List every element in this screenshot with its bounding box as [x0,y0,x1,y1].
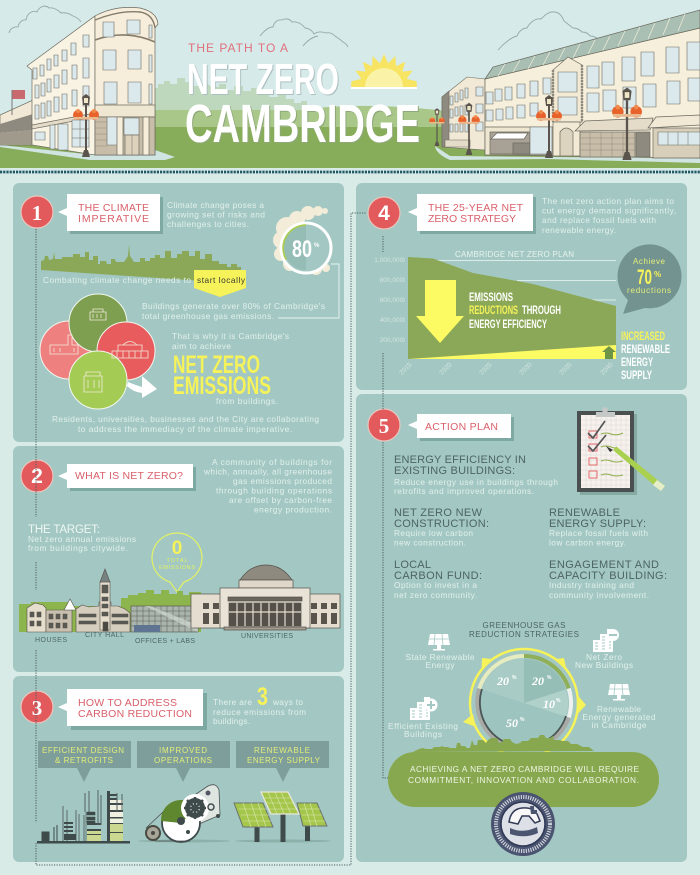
building labels: UNIVERSITIES [241,633,293,640]
start locally callout: start locally [197,275,246,285]
strategies title: REDUCTION STRATEGIES [469,630,579,639]
sun pie chart [463,649,586,757]
panel 3: how to address carbon reduction [13,676,344,862]
ring 80 percent [281,223,331,273]
label: state renewable [406,652,475,670]
action: energy efficiency [394,454,558,496]
badge 3 [21,691,53,723]
action: energy efficiency: retrofits and improved operations. [394,486,534,496]
houses [27,599,76,632]
emissions reductions text: ENERGY EFFICIENCY [469,317,547,331]
city seal [491,792,555,856]
strategy text: cut energy demand significantly, [542,206,676,216]
three ways text: ways to [272,697,303,707]
building labels: CITY HALL [85,632,124,639]
sun [351,54,417,89]
subtitle: THE PATH TO A [188,41,288,55]
hedge [19,590,201,632]
area chart: CAMBRIDGE NET ZERO PLAN [455,250,574,259]
lamp posts [73,88,642,160]
aim text: aim to achieve [172,341,231,351]
icon: local renewable [608,684,630,700]
net zero emissions: EMISSIONS [173,372,271,400]
badge 2 [21,460,53,492]
increased renewable supply text: INCREASED [621,329,665,343]
intro text: challenges to cities. [167,219,249,229]
heading 4 [408,194,536,234]
badge 2: 2 [31,465,43,488]
main grass [0,127,700,168]
definition text: which, annually, all greenhouse [203,466,332,476]
panel 5: action plan [356,394,687,862]
label: state renewable: State Renewable [406,652,475,662]
label: net zero buildings: New Buildings [575,660,633,670]
label: renewable energy supply [236,741,329,782]
sun pie chart: % [512,675,517,681]
title: net zero: NET ZERO [187,55,339,104]
action: local carbon fund: Option to invest in a [394,580,477,590]
strategy text: The net zero action plan aims to [542,196,674,206]
badge 3: 3 [32,696,42,720]
label: efficient design [38,741,131,782]
intro text [167,200,265,229]
label: local renewable: in Cambridge [592,720,647,730]
increased renewable supply text: SUPPLY [621,368,652,382]
three ways text: There are [213,697,252,707]
action: renewable energy supply: ENERGY SUPPLY: [549,518,646,530]
action: engagement [549,559,667,600]
buildings text: Buildings generate over 80% of Cambridge's [142,301,325,311]
closing pill with skyline: COMMITMENT, INNOVATION AND COLLABORATION. [408,775,639,785]
cloud around ring [273,206,330,275]
strategy text: and replace fossil fuels with [542,215,656,225]
sun pie chart: 10 [543,697,555,711]
area chart: 2015 [398,361,414,377]
definition text: energy production. [254,504,332,514]
zero total emissions bubble: TOTAL [166,558,188,564]
down arrow [416,280,464,343]
badge 4: 4 [378,202,390,225]
heading 5: ACTION PLAN [425,421,498,433]
action: engagement: Industry training and [549,580,634,590]
city hall [76,569,130,632]
action: engagement: community involvement. [549,590,649,600]
label: renewable energy supply: RENEWABLE [254,746,310,755]
emissions reductions text [469,290,561,331]
area chart: 2020 [438,361,454,377]
action: local carbon fund: CARBON FUND: [394,570,482,582]
label: local renewable: Energy generated [582,712,656,722]
closing text [52,414,319,434]
net zero emissions: NET ZERO [173,351,260,379]
closing text: to address the immediacy of the climate imperative. [78,424,292,434]
area chart: 2030 [518,361,534,377]
action: energy efficiency: Reduce energy use in buildings through [394,477,558,487]
from buildings: from buildings. [216,396,278,406]
dotted rule [0,171,700,173]
start locally callout [43,270,246,297]
sun pie chart: 50 [506,716,518,730]
badge 1 [21,196,53,228]
the target: from buildings citywide. [28,543,128,553]
start locally callout: Combating climate change needs to [43,275,191,285]
label: improved operations: OPERATIONS [154,756,212,765]
heading 3: HOW TO ADDRESS [78,697,177,709]
panel 4: 25-year strategy [356,183,687,390]
area chart: 1,000,000t [374,257,405,264]
building labels: OFFICES + LABS [135,638,195,645]
three ways text: 3 [257,683,268,711]
three ways text [213,683,306,726]
icon: state renewable [428,634,450,650]
label: local renewable: Renewable [597,704,641,714]
area chart: 200,000t [380,337,405,344]
hills [150,106,470,150]
label: net zero buildings: Net Zero [586,652,622,662]
zero total emissions bubble: 0 [172,538,182,559]
label: efficient design: EFFICIENT DESIGN [42,746,124,755]
heading 1: THE CLIMATE [78,202,149,214]
action: engagement: CAPACITY BUILDING: [549,570,667,582]
heading 2: WHAT IS NET ZERO? [75,470,183,482]
badge 5: 5 [379,414,389,438]
right sidewalk [435,146,700,163]
title: cambridge: CAMBRIDGE [186,95,421,155]
clouds [9,6,601,50]
definition text: through building operations [216,486,332,496]
three ways text: reduce emissions from [213,707,306,717]
action: renewable energy supply: low carbon energy. [549,538,626,548]
the target: Net zero annual emissions [28,534,136,544]
strategies title: GREENHOUSE GAS [482,621,566,630]
intro text: growing set of risks and [167,210,265,220]
action: net zero new construction: NET ZERO NEW [394,507,483,519]
achieve 70 percent bubble: reductions [627,286,671,295]
heading 2 [58,464,196,491]
header illustration [0,0,700,172]
area chart: 2040 [599,361,615,377]
definition text [203,457,332,514]
increased renewable supply text: ENERGY [621,355,653,369]
definition text: gas emissions produced [233,476,332,486]
area chart: 400,000t [380,317,405,324]
achieve 70 percent bubble [618,244,682,314]
label: renewable energy supply: ENERGY SUPPLY [247,756,321,765]
area chart: 2035 [558,361,574,377]
increased renewable supply text [621,329,670,382]
action: net zero new construction [394,507,489,548]
badge 4 [368,197,400,229]
buildings text [142,301,325,321]
strategy text [542,196,676,235]
the target [28,524,136,553]
offices and labs [131,606,198,632]
title: cambridge: CAMBRIDGE [185,94,420,154]
label: state renewable: Energy [426,660,455,670]
badge 1: 1 [32,201,42,225]
icon: solar panels [234,792,331,842]
area chart: 800,000t [380,277,405,284]
area chart: 600,000t [380,297,405,304]
area chart: 2025 [478,361,494,377]
strategies title [469,621,579,639]
emissions reductions text: REDUCTIONS [469,303,518,317]
label: efficient buildings [388,721,458,739]
ring 80 percent: 80 [292,236,312,263]
right small building [442,77,485,150]
title: net zero [187,55,340,105]
aim text: That is why it is Cambridge's [172,331,289,341]
label: efficient buildings: Buildings [404,729,442,739]
action: renewable energy supply: RENEWABLE [549,507,620,519]
achieve 70 percent bubble: Achieve [633,257,666,266]
heading 1: IMPERATIVE [78,213,149,225]
label: improved operations: IMPROVED [159,746,207,755]
universities [191,565,340,630]
definition text: A community of buildings for [212,457,332,467]
icon: gears [138,785,230,842]
sun pie chart: % [556,698,561,704]
action: net zero new construction: new construction. [394,538,466,548]
skyline behind title [153,78,333,138]
action: renewable energy supply: Replace fossil fuels with [549,528,648,538]
action: engagement: ENGAGEMENT AND [549,559,659,571]
right long building [485,10,700,158]
heading 5 [408,414,514,441]
the target: THE TARGET: [28,524,100,536]
closing pill with skyline: ACHIEVING A NET ZERO CAMBRIDGE WILL REQUIRE [410,764,639,774]
label: net zero buildings [575,652,633,670]
achieve 70 percent bubble: % [654,270,661,279]
zero total emissions bubble [152,533,202,592]
heading 1 [58,194,163,234]
timeline dotted connectors [36,213,388,865]
icon: clipboard [577,407,665,495]
label: improved operations [137,741,230,782]
action: energy efficiency: EXISTING BUILDINGS: [394,465,515,477]
ring 80 percent: % [314,243,320,249]
four circles [40,294,155,409]
aim text [172,331,289,351]
buildings text: total greenhouse gas emissions. [142,311,274,321]
heading 4: ZERO STRATEGY [428,213,516,225]
net zero emissions [173,351,271,400]
label: efficient design: & RETROFITS [55,756,113,765]
action: renewable energy supply [549,507,648,548]
action: local carbon fund: net zero community. [394,590,477,600]
action: local carbon fund: LOCAL [394,559,431,571]
left sidewalk [0,145,175,160]
icon: efficient buildings [410,697,438,720]
strategy text: renewable energy. [542,225,616,235]
icon: net zero buildings [593,629,619,652]
action: net zero new construction: Require low carbon [394,528,473,538]
panel 1: the climate imperative [13,183,344,442]
heading 3: CARBON REDUCTION [78,708,192,720]
definition text: are offset by carbon-free [229,495,332,505]
heading 4: THE 25-YEAR NET [428,202,524,214]
closing pill with skyline [388,735,659,807]
panel 2: what is net zero [13,446,344,672]
arrow to net zero [127,376,157,398]
closing text: Residents, universities, businesses and the City are collaborating [52,414,319,424]
label: local renewable [582,704,656,730]
three ways text: buildings. [213,716,250,726]
action: energy efficiency: ENERGY EFFICIENCY IN [394,454,526,466]
left flatiron building [27,7,158,155]
connector arrow [278,264,339,318]
sun pie chart: % [520,717,525,723]
area chart [374,250,616,377]
increased renewable supply text: RENEWABLE [621,342,670,356]
icon: buildings under retrofit [37,790,130,844]
left low building and flag [0,90,33,145]
building labels: HOUSES [35,637,67,644]
emissions reductions text: THROUGH [522,303,561,317]
sun pie chart: 20 [496,674,509,688]
intro text: Climate change poses a [167,200,264,210]
action: local carbon fund [394,559,482,600]
action: net zero new construction: CONSTRUCTION: [394,518,489,530]
heading 3 [58,689,207,730]
title: net zero: NET ZERO [188,56,340,105]
badge 5 [368,409,400,441]
label: efficient buildings: Efficient Existing [388,721,458,731]
skyline 1 [41,244,246,284]
zero total emissions bubble: EMISSIONS [159,565,195,571]
sun pie chart: % [547,675,552,681]
building labels [35,632,293,645]
achieve 70 percent bubble: 70 [637,266,652,289]
emissions reductions text: EMISSIONS [469,290,513,304]
sun pie chart: 20 [531,674,544,688]
